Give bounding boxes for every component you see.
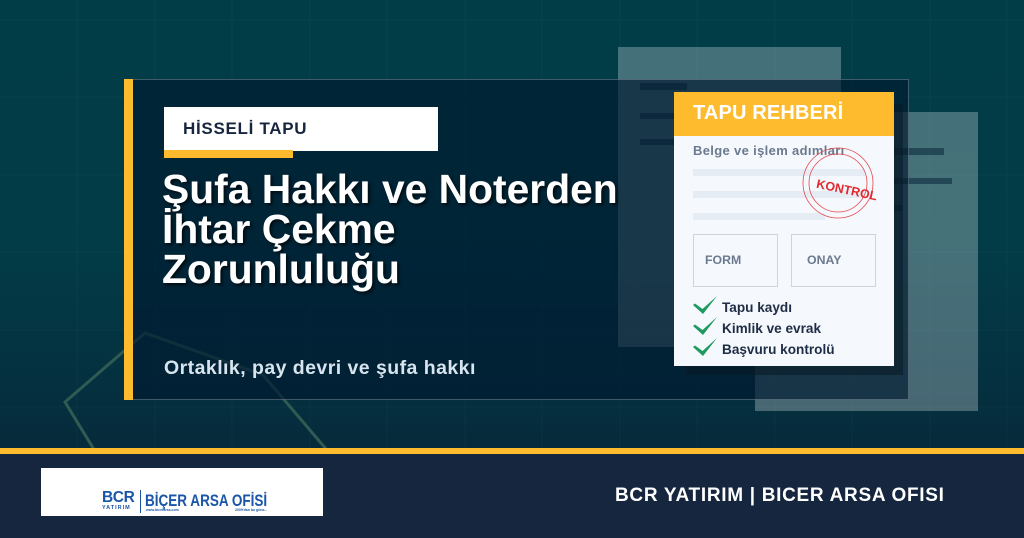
card xyxy=(674,92,894,366)
title: İhtar Çekme xyxy=(162,206,396,252)
logo YATIRIM: YATIRIM xyxy=(102,505,131,511)
logo xyxy=(41,468,323,516)
card shadow xyxy=(686,104,903,375)
stamp xyxy=(802,148,879,218)
footer brand text: BCR YATIRIM | BICER ARSA OFISI xyxy=(615,485,945,506)
tag underline xyxy=(164,150,293,158)
placeholder line 2 xyxy=(693,191,865,198)
checklist item 2: Kimlik ve evrak xyxy=(722,321,821,336)
logo BİÇER ARSA OFİSİ: BİÇER ARSA OFİSİ xyxy=(145,491,267,510)
card heading: TAPU REHBERİ xyxy=(693,102,843,124)
footer accent stripe xyxy=(0,448,1024,454)
tag background xyxy=(164,107,438,151)
form label: FORM xyxy=(705,253,741,267)
footer xyxy=(0,448,1024,538)
category tag xyxy=(164,107,438,158)
logo BCR: BCR xyxy=(102,489,134,506)
logo web address: www.bicerarsa.com xyxy=(146,508,179,512)
title: Zorunluluğu xyxy=(162,246,400,292)
back document right xyxy=(755,112,978,411)
title xyxy=(162,166,619,294)
logo divider xyxy=(140,490,141,513)
stamp: KONTROL xyxy=(815,177,879,203)
panel accent bar xyxy=(124,79,133,400)
logo tagline: 2009'dan bu güne... xyxy=(235,508,267,512)
checklist item 1: Tapu kaydı xyxy=(722,300,792,315)
placeholder line 3 xyxy=(693,213,825,220)
card header xyxy=(674,92,894,136)
tag text: HİSSELİ TAPU xyxy=(183,119,307,138)
check icons xyxy=(693,296,717,356)
subtitle: Ortaklık, pay devri ve şufa hakkı xyxy=(164,357,476,379)
placeholder line 1 xyxy=(693,169,865,176)
main panel xyxy=(124,79,909,400)
form box xyxy=(693,234,778,287)
approval box xyxy=(791,234,876,287)
checklist item 3: Başvuru kontrolü xyxy=(722,342,835,357)
card subheading: Belge ve işlem adımları xyxy=(693,143,845,158)
title: Şufa Hakkı ve Noterden xyxy=(162,166,618,212)
back document left xyxy=(618,47,841,347)
approval label: ONAY xyxy=(807,253,841,267)
